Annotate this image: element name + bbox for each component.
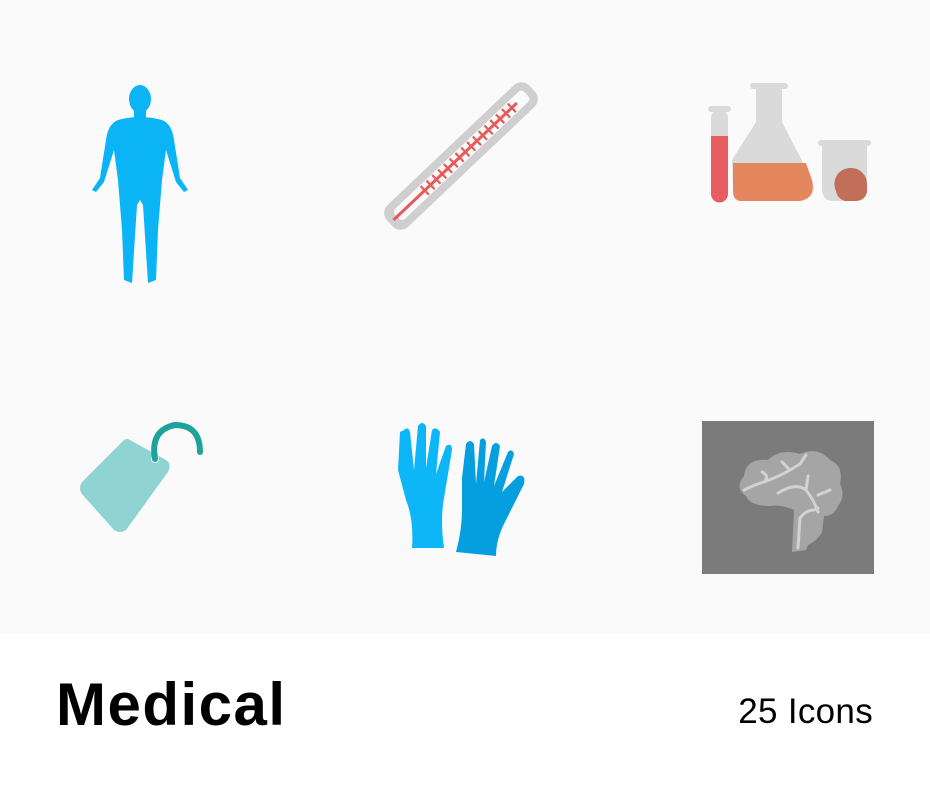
title: Medical <box>56 671 287 738</box>
icon: lab flasks <box>708 83 871 202</box>
icon: human body <box>92 85 188 283</box>
icon: thermometer <box>380 78 542 234</box>
icon: tag <box>80 425 200 532</box>
icon: gloves <box>398 423 524 556</box>
icon: brain x-ray <box>702 421 874 574</box>
icon count: 25 Icons <box>738 692 873 731</box>
